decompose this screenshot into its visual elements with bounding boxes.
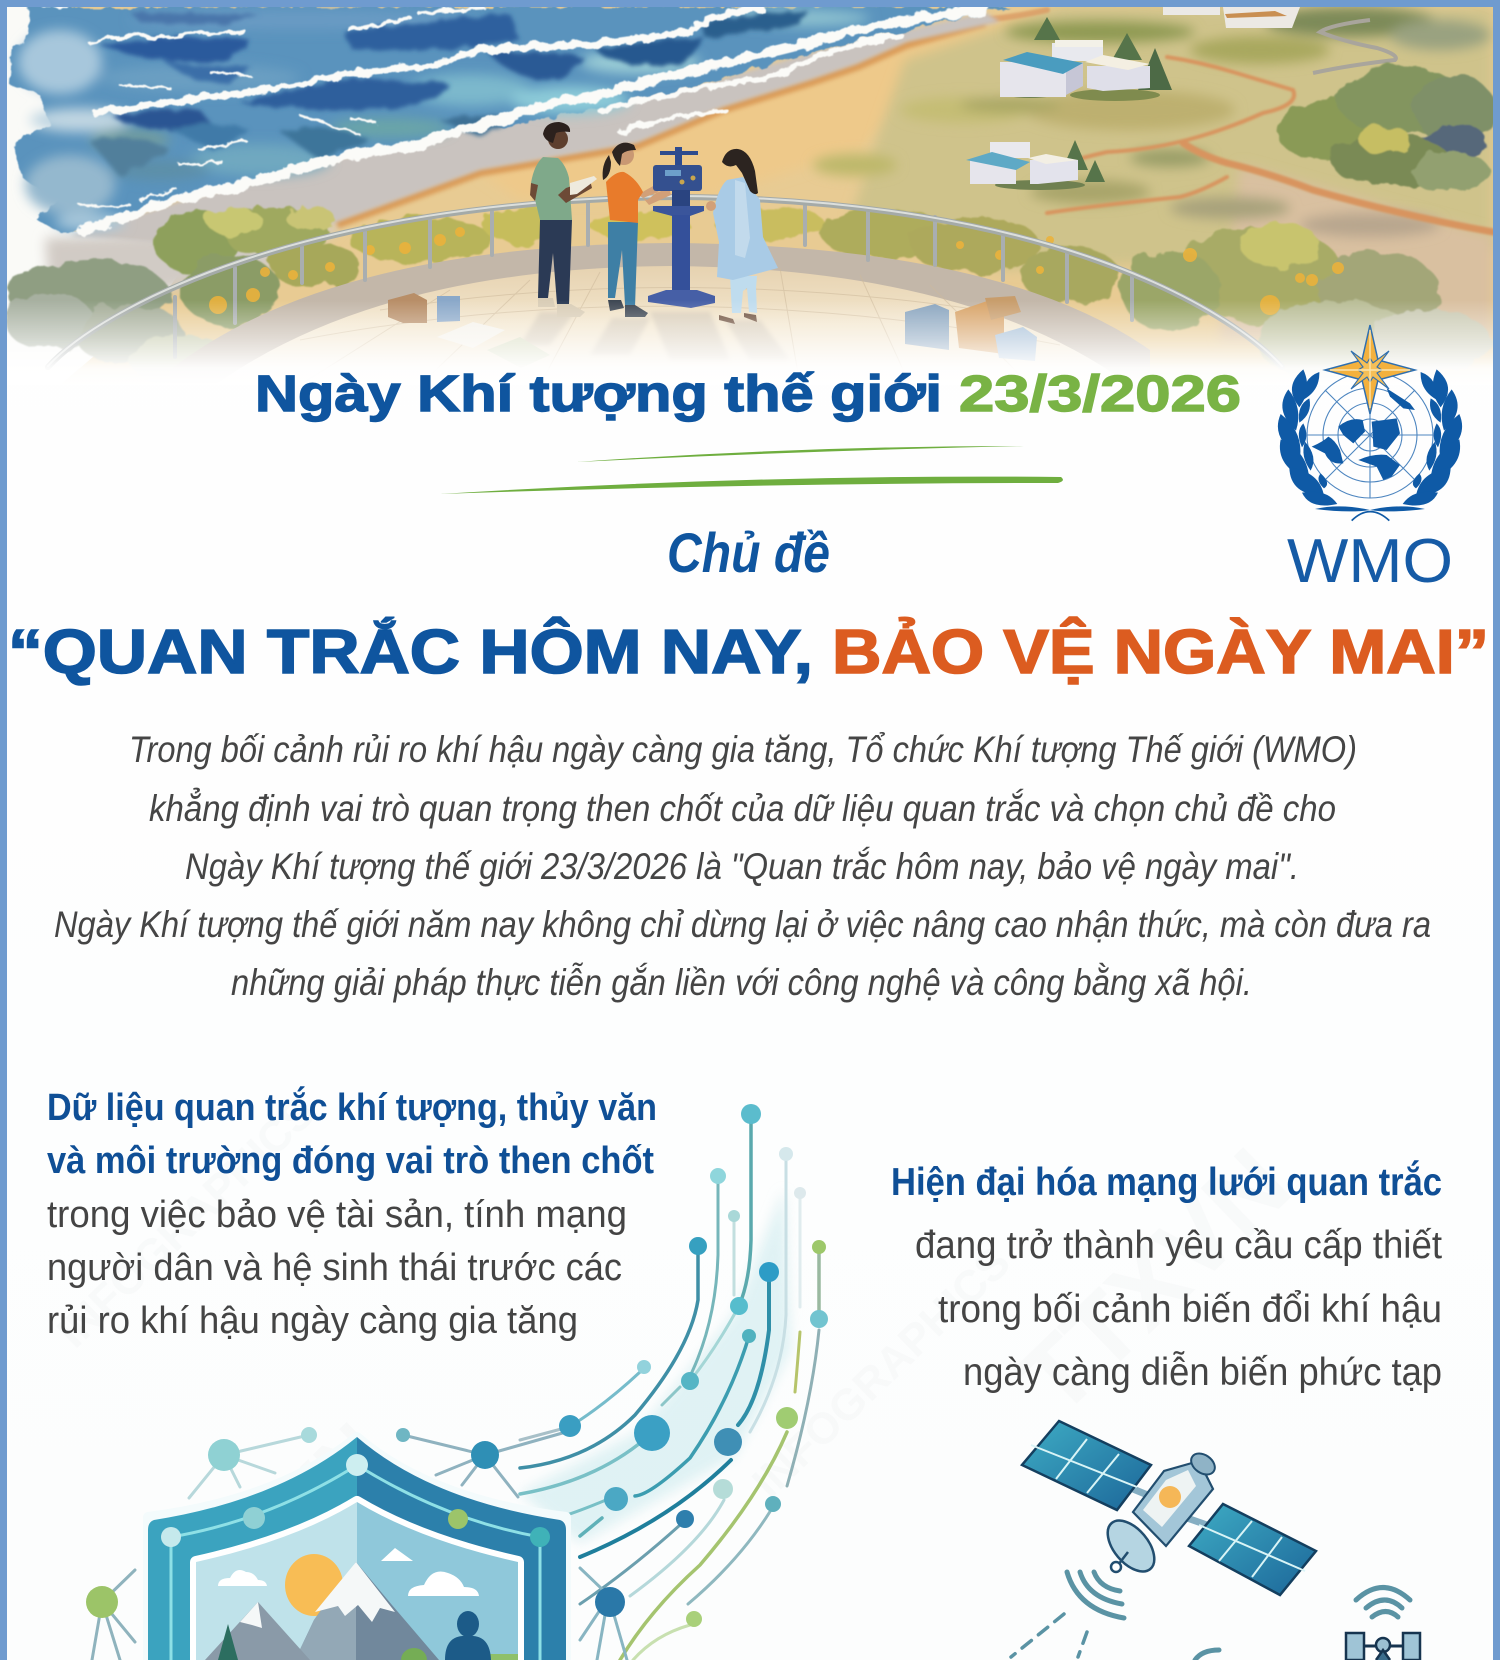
grey lane [1313, 20, 1396, 73]
sea body [10, 7, 1010, 232]
watermark: INFOGRAPHICS [743, 1238, 1020, 1507]
shield inner frame [196, 1502, 518, 1660]
boxes and documents [388, 293, 1037, 368]
satellite: left solar panel [1022, 1421, 1151, 1510]
woman in orange shirt [603, 143, 671, 317]
theme headline: “QUAN TRẮC HÔM NAY, [8, 618, 813, 687]
people and instrument [530, 122, 778, 324]
figure shadows [525, 312, 776, 350]
right text block: đang trở thành yêu cầu cấp thiết [915, 1224, 1442, 1267]
man with tablet [530, 122, 597, 317]
watermark: INFOGRAPHICS [48, 1088, 325, 1357]
left text block: và môi trường đóng vai trò then chốt [47, 1140, 654, 1182]
intro paragraph: Trong bối cảnh rủi ro khí hậu ngày càng gia tăng, Tổ chức Khí tượng Thế giới (WMO) [129, 729, 1357, 770]
beach edge [337, 22, 985, 224]
sun [285, 1554, 343, 1616]
data network illustration [86, 1104, 828, 1660]
green hills [490, 1654, 518, 1660]
subtitle: theme label: Chủ đề [667, 521, 830, 584]
satellite illustration [1011, 1421, 1420, 1660]
intro paragraph: khẳng định vai trò quan trọng then chốt của dữ liệu quan trắc và chọn chủ đề cho [149, 787, 1336, 829]
intro paragraph: Ngày Khí tượng thế giới 23/3/2026 là "Quan trắc hôm nay, bảo vệ ngày mai". [185, 846, 1299, 887]
title: Ngày Khí tượng thế giới [255, 365, 942, 422]
shield circuit lines [171, 1465, 540, 1660]
left text block: trong việc bảo vệ tài sản, tính mạng [47, 1194, 627, 1236]
bottom white fade [0, 300, 1500, 385]
wet sand [70, 12, 1000, 245]
satellite: body [1133, 1449, 1219, 1546]
intro paragraph [54, 729, 1431, 1003]
satellite: dish [1099, 1512, 1163, 1580]
theme headline: BẢO VỆ NGÀY MAI” [832, 618, 1489, 687]
railing [48, 196, 1282, 367]
satellite: struts [1133, 1489, 1207, 1525]
sea tints [18, 10, 870, 231]
coastal buildings [966, 7, 1300, 190]
white foam [80, 8, 985, 232]
shield nodes [161, 1454, 550, 1547]
person figure [457, 1611, 479, 1637]
landscape inside the shield [196, 1500, 518, 1660]
intro paragraph: những giải pháp thực tiễn gắn liền với công nghệ và công bằng xã hội. [231, 962, 1252, 1003]
deck wall and floor [214, 243, 1150, 356]
right text block: trong bối cảnh biến đổi khí hậu [938, 1288, 1442, 1331]
right text block: ngày càng diễn biến phức tạp [963, 1351, 1442, 1394]
pale paper margin at the left [7, 7, 174, 366]
woman in pale blue coat [706, 149, 778, 324]
dark wave bands [90, 12, 810, 176]
shield body [148, 1437, 566, 1660]
ocean with waves [10, 7, 1010, 245]
hero illustration: coastal observation deck [0, 0, 1500, 385]
network lines [92, 1114, 819, 1660]
network nodes [86, 1104, 828, 1627]
land and beach [0, 0, 1493, 385]
right text block: Hiện đại hóa mạng lưới quan trắc [891, 1160, 1442, 1204]
left text block: rủi ro khí hậu ngày càng gia tăng [47, 1300, 578, 1342]
grey sand lower left [45, 220, 345, 300]
logo: compass star [1325, 325, 1415, 414]
watermark: TTXVN [150, 1406, 400, 1652]
mountains [295, 1562, 439, 1660]
satellite: right solar panel [1189, 1504, 1316, 1595]
dirt roads [980, 10, 1493, 232]
left text block: người dân và hệ sinh thái trước các [47, 1247, 622, 1289]
clouds [218, 1548, 479, 1596]
WMO logo [1278, 325, 1462, 596]
watermark [48, 1088, 1311, 1652]
trees [1034, 17, 1172, 182]
yellow flowers [209, 227, 1344, 315]
title date: 23/3/2026 [959, 365, 1241, 422]
logo: globe [1307, 372, 1433, 498]
logo: continents and laurel wreath [1278, 369, 1462, 521]
left text block: Dữ liệu quan trắc khí tượng, thủy văn [47, 1085, 657, 1129]
green swoosh underline [440, 446, 1063, 494]
floor tiles [300, 270, 1060, 356]
watermark: TTXVN [997, 1128, 1311, 1436]
logo: WMO wordmark: WMO [1287, 527, 1453, 596]
theme headline [8, 618, 1489, 687]
small satellite [1346, 1633, 1420, 1660]
weather instrument [648, 147, 715, 308]
shrubs on the right [1275, 65, 1495, 192]
signal waves [1011, 1572, 1410, 1660]
shield illustration [148, 1437, 566, 1660]
foreground shrubs [7, 204, 1493, 362]
right text block [891, 1160, 1442, 1394]
left text block [47, 1085, 657, 1342]
